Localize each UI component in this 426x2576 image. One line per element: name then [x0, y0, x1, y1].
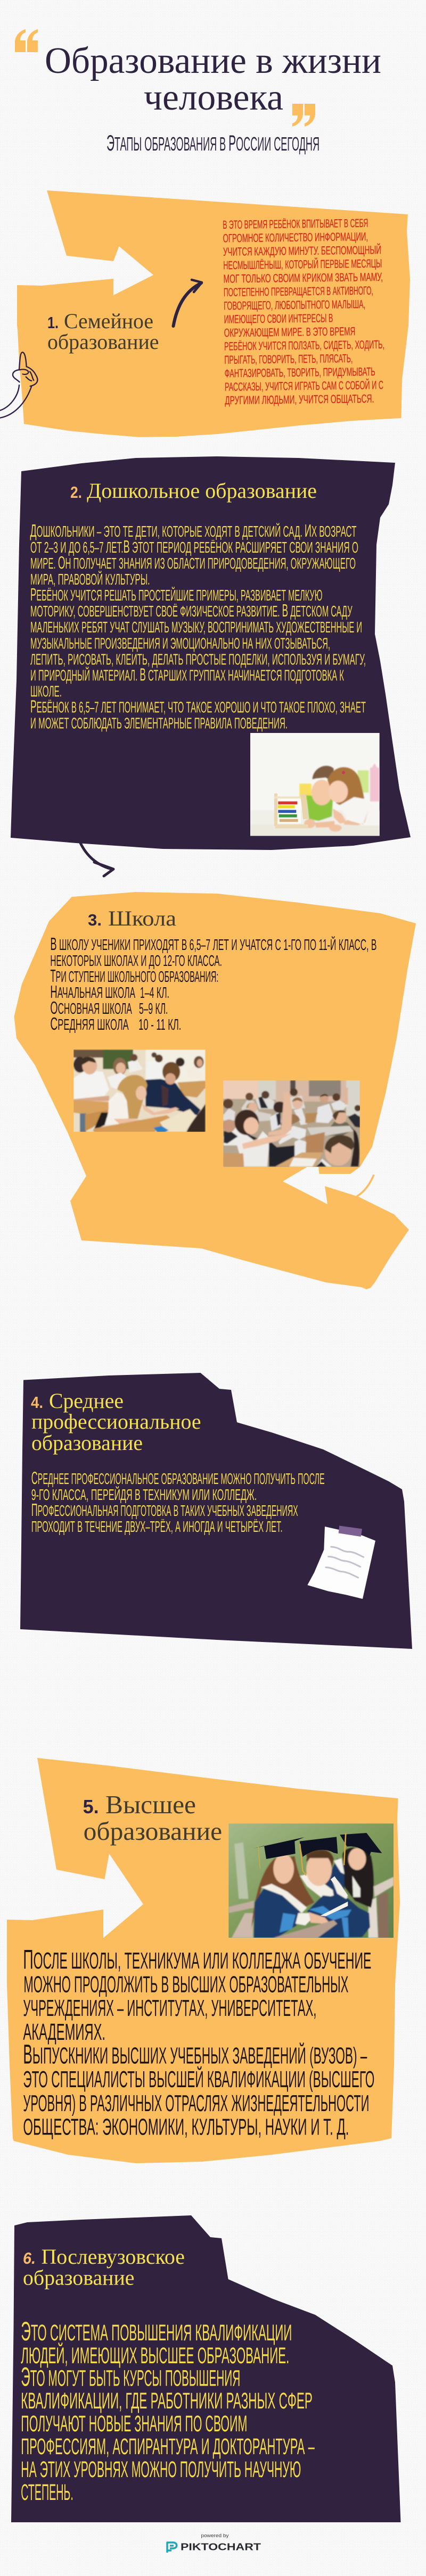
panel: family education: [0, 190, 410, 437]
heading: postgraduate education: 6.: [23, 2249, 36, 2267]
panel shape: [20, 1373, 412, 1649]
panel shape with arrow notch: [17, 190, 410, 437]
heading: vocational education: образование: [31, 1431, 143, 1455]
text: preschool description: [30, 521, 366, 732]
panel: postgraduate education: [11, 2215, 400, 2522]
photo: high school class: [73, 1049, 206, 1132]
heading: school: 3.: [88, 911, 102, 929]
text: vocational description: 9-ГО КЛАССА, ПЕРЕЙДЯ В ТЕХНИКУМ ИЛИ КОЛЛЕДЖ.: [31, 1486, 257, 1504]
panel: vocational education: [20, 1373, 412, 1649]
heading: family education: [47, 309, 159, 354]
text: school description: [50, 935, 376, 1034]
text: school description: НЕКОТОРЫХ ШКОЛАХ И ДО 12-ГО КЛАССА.: [50, 953, 222, 970]
title: человека: [144, 77, 283, 118]
heading: family education: Семейное: [64, 309, 153, 333]
text: school description: ТРИ СТУПЕНИ ШКОЛЬНОГО ОБРАЗОВАНИЯ:: [50, 966, 218, 986]
text: postgraduate description: СТЕПЕНЬ.: [21, 2480, 73, 2505]
subtitle: ЭТАПЫ ОБРАЗОВАНИЯ В РОССИИ СЕГОДНЯ: [106, 130, 320, 155]
heading: vocational education: профессиональное: [31, 1410, 201, 1433]
heading: postgraduate education: образование: [23, 2266, 134, 2289]
panel shape: [11, 456, 411, 850]
icon: pointing hand: [0, 352, 37, 418]
photo: children with abacus: [250, 733, 380, 836]
arrow: preschool to school: [77, 835, 113, 876]
powered by label: powered by: [201, 2533, 229, 2539]
heading: higher education: 5.: [83, 1796, 99, 1818]
panel shape: [11, 2215, 400, 2522]
title: [45, 40, 381, 118]
arrow tail: [357, 1176, 374, 1196]
Piktochart wordmark: PIKTOCHART: [181, 2541, 261, 2552]
heading: higher education: Высшее: [105, 1790, 196, 1819]
panel: higher education: [7, 1758, 400, 2163]
panel shape with arrow notch: [14, 892, 416, 1289]
heading: vocational education: 4.: [31, 1393, 43, 1412]
heading: school: [88, 906, 176, 930]
text: school description: ОСНОВНАЯ ШКОЛА 5–9 КЛ.: [50, 998, 168, 1018]
heading: higher education: образование: [84, 1816, 222, 1846]
heading: postgraduate education: [23, 2245, 185, 2289]
closing quote icon: [292, 104, 315, 127]
text: family education description: ИМЕЮЩЕГО СВОИ ИНТЕРЕСЫ В: [224, 311, 333, 326]
text: higher education description: АКАДЕМИЯХ.: [23, 2019, 105, 2045]
icon: curved arrow: [174, 280, 202, 326]
text: higher education description: [23, 1944, 374, 2140]
text: vocational description: [31, 1469, 325, 1536]
text: preschool description: МИРА, ПРАВОВОЙ КУЛЬТУРЫ.: [30, 570, 150, 588]
text: school description: СРЕДНЯЯ ШКОЛА 10 - 11 КЛ.: [50, 1014, 181, 1034]
heading: family education: образование: [47, 330, 159, 354]
photo: class raising hands: [223, 1080, 361, 1167]
icon: Piktochart logo: [167, 2542, 177, 2553]
heading: preschool education: Дошкольное образование: [87, 479, 317, 503]
title: Образование в жизни: [45, 40, 381, 81]
text: postgraduate description: [21, 2316, 315, 2505]
panel shape with arrow notch: [7, 1758, 400, 2163]
footer: Piktochart branding: [167, 2533, 261, 2553]
heading: higher education: [83, 1790, 222, 1846]
opening quote icon: [15, 29, 38, 52]
heading: vocational education: [31, 1389, 201, 1455]
icon: taped note: [307, 1525, 375, 1599]
panel: preschool education: [11, 456, 411, 850]
photo: graduates: [228, 1823, 394, 1938]
text: school description: НАЧАЛЬНАЯ ШКОЛА 1–4 КЛ.: [50, 982, 169, 1002]
heading: family education: 1.: [47, 313, 59, 332]
text: preschool description: ШКОЛЕ.: [30, 683, 62, 700]
text: family education description: [223, 216, 385, 407]
heading: postgraduate education: Послевузовское: [42, 2245, 185, 2269]
heading: vocational education: Среднее: [49, 1389, 124, 1413]
title block: [15, 29, 381, 155]
heading: school: Школа: [108, 906, 176, 930]
panel: school: [14, 892, 416, 1289]
heading: preschool education: 2.: [70, 483, 82, 502]
